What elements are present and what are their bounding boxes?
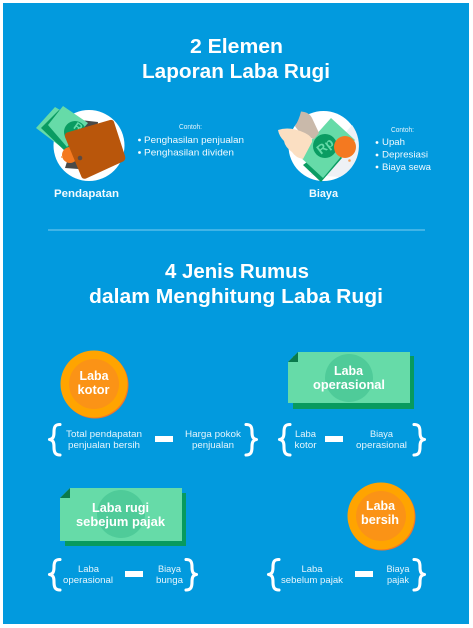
heading: 4 Jenis Rumus: 4 Jenis Rumus (165, 261, 309, 283)
text: contoh pendapatan (138, 124, 244, 158)
icon: coin laba bersih (348, 482, 416, 550)
formula: laba rugi sebelum pajak: Biaya (158, 564, 182, 575)
icon: flying money: Rp (314, 135, 336, 157)
formula: laba rugi sebelum pajak (50, 560, 196, 590)
formula: laba rugi sebelum pajak: Laba (78, 564, 100, 575)
formula: laba operasional: kotor (294, 440, 316, 451)
icon: banknote laba operasional: operasional (313, 378, 385, 392)
formula: laba kotor: Total pendapatan (66, 429, 142, 440)
formula: laba bersih: pajak (387, 575, 409, 586)
label: Pendapatan: Pendapatan (54, 188, 119, 200)
icon: coin laba kotor: Laba (80, 369, 110, 383)
icon: coin laba bersih: bersih (361, 513, 399, 527)
formula: laba kotor: penjualan (192, 440, 234, 451)
text: contoh pendapatan: Contoh: (179, 124, 202, 131)
panel: laba rugi sebelum pajak (50, 488, 196, 590)
icon: banknote laba rugi sebelum pajak (60, 488, 186, 546)
formula: laba operasional: Laba (295, 429, 317, 440)
icon: coin laba bersih: Laba (366, 499, 396, 513)
formula: laba bersih: Biaya (386, 564, 410, 575)
text: contoh pendapatan: Penghasilan dividen (144, 148, 234, 158)
formula: laba bersih (268, 560, 424, 590)
panel: laba kotor (50, 350, 256, 455)
icon: banknote laba operasional (288, 352, 414, 409)
formula: laba operasional: Biaya (370, 429, 394, 440)
icon: coin laba kotor (60, 350, 128, 418)
heading: 4 Jenis Rumus: dalam Menghitung Laba Rugi (89, 286, 383, 308)
icon: wallet and money: R (71, 120, 84, 135)
panel: laba bersih (268, 482, 424, 590)
title: 2 Elemen Laporan Laba Rugi: Laporan Laba Rugi (142, 61, 330, 83)
icon: banknote laba rugi sebelum pajak: Laba rugi (92, 501, 149, 515)
text: contoh biaya: Contoh: (391, 127, 414, 134)
panel: pendapatan (36, 106, 244, 200)
formula: laba rugi sebelum pajak: operasional (63, 575, 113, 586)
icon: banknote laba rugi sebelum pajak: sebejum pajak (76, 515, 165, 529)
text: contoh pendapatan: Penghasilan penjualan (144, 135, 244, 146)
title: 2 Elemen Laporan Laba Rugi: 2 Elemen (190, 36, 283, 58)
label: Biaya: Biaya (309, 188, 339, 200)
formula: laba operasional (280, 424, 424, 455)
formula: laba bersih: sebelum pajak (281, 575, 343, 586)
icon: wallet and money (36, 106, 125, 181)
formula: laba kotor: penjualan bersih (68, 440, 140, 451)
formula: laba kotor (50, 424, 256, 455)
icon: coin laba kotor: kotor (78, 383, 110, 397)
text: contoh biaya: Upah (382, 137, 405, 148)
text: contoh biaya: Depresiasi (382, 150, 428, 160)
text: contoh biaya: Biaya sewa (382, 162, 432, 173)
formula: laba bersih: Laba (302, 564, 323, 575)
icon: flying money (278, 111, 359, 182)
panel: laba operasional (280, 352, 424, 455)
formula: laba rugi sebelum pajak: bunga (156, 575, 184, 586)
formula: laba kotor: Harga pokok (185, 429, 241, 440)
formula: laba operasional: operasional (356, 440, 407, 451)
icon: banknote laba operasional: Laba (334, 364, 364, 378)
text: contoh biaya (376, 127, 432, 173)
heading: 4 Jenis Rumus (89, 261, 383, 308)
panel: biaya (278, 111, 432, 200)
title: 2 Elemen Laporan Laba Rugi (142, 36, 330, 83)
